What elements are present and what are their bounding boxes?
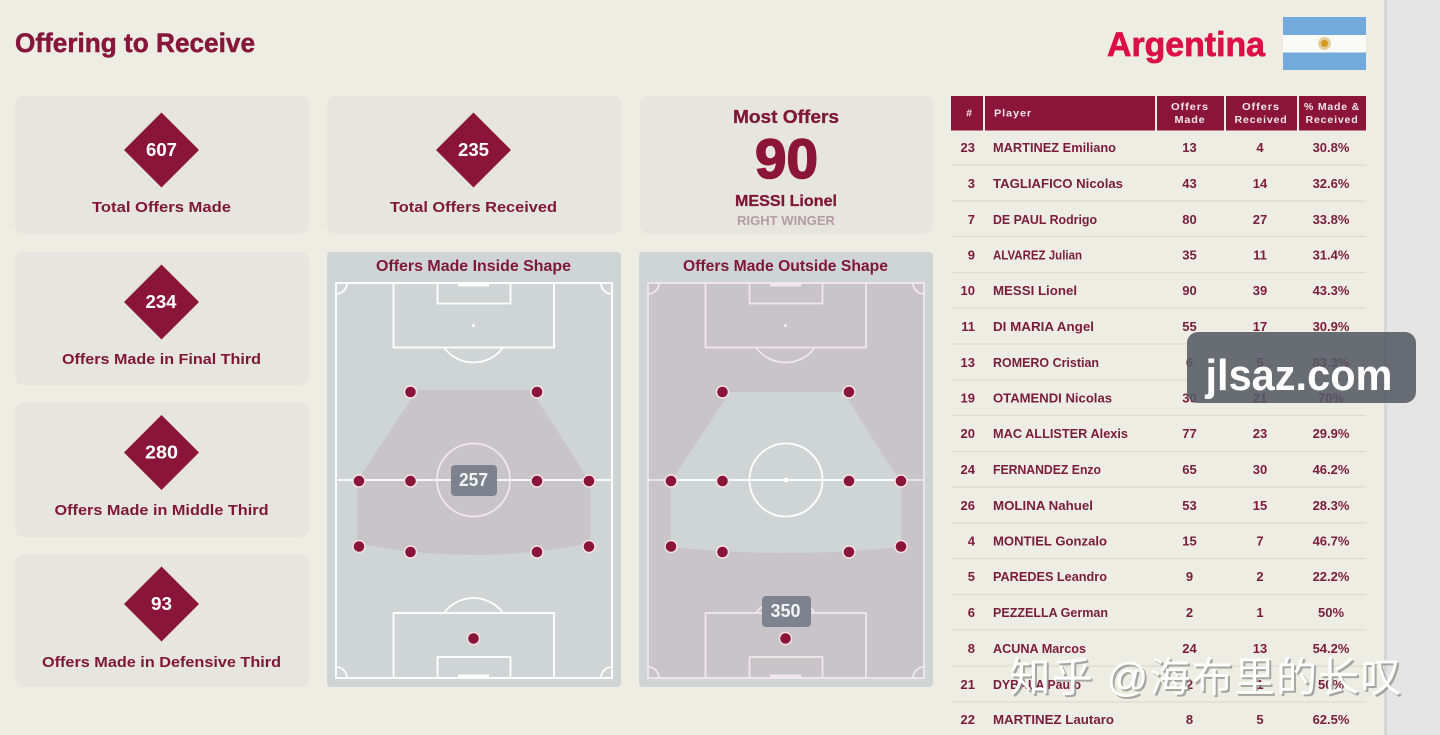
heading: Offers Made Outside Shape	[683, 258, 888, 275]
row: Molina: 28.3%	[1313, 498, 1350, 513]
row: Paredes: 5	[968, 569, 975, 584]
label: Offers Made in Middle Third	[54, 502, 268, 519]
panel: offers made inside shape	[327, 252, 621, 687]
row: Di Maria: 17	[1253, 319, 1267, 334]
row: Montiel: 4	[968, 534, 976, 548]
row: Montiel: 7	[1256, 534, 1264, 548]
row: Montiel: MONTIEL Gonzalo	[993, 534, 1107, 548]
shaded pitch area	[648, 283, 924, 678]
player position dots	[353, 386, 595, 644]
table header: Offers	[1171, 101, 1209, 113]
row: Romero: ROMERO Cristian	[993, 355, 1099, 370]
row: Mac Allister: 20	[961, 426, 975, 441]
row: Mac Allister	[961, 426, 1350, 441]
icon: Argentina flag	[1283, 17, 1366, 70]
row: Martinez Lautaro: MARTINEZ Lautaro	[993, 712, 1114, 727]
row: Pezzella: 50%	[1318, 605, 1344, 620]
row: Martinez Emiliano: 13	[1182, 140, 1197, 155]
row: Messi	[961, 283, 1350, 298]
panel: offers in final third	[15, 252, 309, 385]
value badge 257: 257	[459, 470, 488, 490]
row: Martinez Lautaro: 8	[1186, 712, 1193, 727]
row: Martinez Emiliano: 23	[961, 140, 975, 155]
row: Mac Allister: 77	[1182, 426, 1197, 441]
row: De Paul	[968, 212, 1350, 227]
row: Fernandez: 46.2%	[1313, 462, 1350, 477]
row: Martinez Emiliano: 4	[1256, 140, 1264, 155]
row: Tagliafico: 3	[968, 176, 975, 191]
row: Montiel: 46.7%	[1313, 534, 1350, 548]
row: Acuna	[968, 641, 1350, 656]
row: De Paul: 7	[968, 212, 975, 227]
title: Offering to Receive	[15, 28, 255, 58]
icon: diamond 280	[124, 415, 199, 490]
row: Romero	[961, 355, 1350, 370]
player position dots	[665, 386, 907, 644]
heading: Most Offers	[733, 107, 839, 127]
row: Montiel: 15	[1182, 534, 1197, 548]
row: Alvarez: ALVAREZ Julian	[993, 248, 1082, 262]
row: Martinez Lautaro	[961, 712, 1350, 727]
player name: MESSI Lionel	[735, 193, 837, 210]
row: Fernandez	[961, 462, 1350, 477]
value badge 257	[451, 465, 497, 496]
label: Total Offers Made	[92, 199, 231, 216]
big number: 90	[755, 127, 818, 190]
row: Paredes: 9	[1186, 569, 1193, 584]
row: Messi: 39	[1253, 283, 1267, 298]
row: Tagliafico: 32.6%	[1313, 176, 1350, 191]
row: Martinez Lautaro: 62.5%	[1313, 712, 1350, 727]
row: Di Maria: 30.9%	[1313, 319, 1350, 334]
table header: Received	[1234, 114, 1288, 126]
row: Otamendi: 21	[1253, 390, 1267, 406]
row: De Paul: 33.8%	[1313, 212, 1350, 227]
row: Martinez Emiliano	[961, 140, 1350, 155]
row: Acuna: 54.2%	[1313, 641, 1350, 656]
row: Dybala: 1	[1256, 677, 1264, 692]
table header: Offers	[1242, 101, 1280, 113]
row: Messi: 90	[1182, 283, 1197, 298]
row: Mac Allister: 29.9%	[1313, 426, 1350, 441]
pitch markings	[336, 283, 612, 678]
row: Tagliafico: TAGLIAFICO Nicolas	[993, 176, 1123, 191]
row: Fernandez: FERNANDEZ Enzo	[993, 462, 1101, 477]
row: Mac Allister: 23	[1253, 426, 1267, 441]
value badge 350	[762, 596, 811, 627]
row: Alvarez: 35	[1182, 248, 1197, 262]
row: Pezzella: 2	[1186, 605, 1193, 620]
label: Offers Made in Defensive Third	[42, 654, 281, 671]
row: Romero: 5	[1256, 355, 1264, 370]
row: Martinez Emiliano: MARTINEZ Emiliano	[993, 140, 1116, 155]
row: Pezzella	[968, 605, 1344, 620]
row: Paredes: 22.2%	[1313, 569, 1350, 584]
table header: #	[966, 108, 973, 120]
icon: diamond 93	[124, 566, 199, 642]
icon: diamond 234	[124, 264, 199, 340]
row: Tagliafico	[968, 176, 1350, 191]
row: Otamendi: 19	[961, 390, 975, 406]
icon: diamond 235	[436, 112, 511, 188]
icon: diamond 235: 235	[458, 140, 489, 160]
row: Otamendi: 70%	[1318, 390, 1344, 406]
row: Otamendi: OTAMENDI Nicolas	[993, 390, 1112, 406]
row: De Paul: 27	[1253, 212, 1267, 227]
row: Romero: 6	[1186, 355, 1193, 370]
row: De Paul: 80	[1182, 212, 1197, 227]
panel: offers in middle third	[15, 403, 309, 537]
panel: total offers received	[327, 96, 622, 234]
row: Messi: 43.3%	[1313, 283, 1350, 298]
row: Martinez Lautaro: 22	[961, 712, 975, 727]
row: Paredes	[968, 569, 1350, 584]
row: Pezzella: 6	[968, 605, 975, 620]
row: Molina: 26	[961, 498, 975, 513]
row: Tagliafico: 43	[1182, 176, 1197, 191]
row: Messi: MESSI Lionel	[993, 283, 1077, 298]
row: Acuna: 13	[1253, 641, 1267, 656]
panel: most offers	[640, 96, 933, 234]
row: Dybala	[961, 677, 1344, 692]
shaded shape area	[357, 390, 590, 555]
row: Di Maria: 55	[1182, 319, 1197, 334]
row: Molina: 53	[1182, 498, 1197, 513]
row: Paredes: 2	[1256, 569, 1264, 584]
panel: total offers made	[15, 96, 309, 234]
row: Dybala: DYBALA Paulo	[993, 677, 1081, 692]
row: Romero: 13	[961, 355, 975, 370]
player position: RIGHT WINGER	[737, 213, 836, 228]
panel: offers made outside shape	[639, 252, 933, 687]
label: Total Offers Received	[390, 199, 557, 216]
table header: Player	[994, 108, 1032, 120]
row: Otamendi	[961, 390, 1344, 406]
row: Fernandez: 65	[1182, 462, 1197, 477]
row: Alvarez: 9	[968, 248, 975, 262]
row: Fernandez: 30	[1253, 462, 1267, 477]
row: Molina: MOLINA Nahuel	[993, 498, 1093, 513]
watermark: zhihu author: 知乎 @海布里的长叹	[1010, 654, 1402, 700]
value badge 350: 350	[770, 601, 800, 621]
table header: Received	[1306, 114, 1358, 126]
row: Martinez Lautaro: 5	[1256, 712, 1264, 727]
row: Dybala: 50%	[1318, 677, 1344, 692]
watermark: jlsaz.com	[1187, 332, 1416, 403]
row: Fernandez: 24	[961, 462, 976, 477]
row: Montiel	[968, 534, 1350, 548]
row: Paredes: PAREDES Leandro	[993, 569, 1107, 584]
row: Martinez Emiliano: 30.8%	[1313, 140, 1350, 155]
row: Pezzella: PEZZELLA German	[993, 605, 1108, 620]
panel: offers in defensive third	[15, 555, 309, 687]
row: Tagliafico: 14	[1253, 176, 1268, 191]
row: Dybala: 2	[1186, 677, 1193, 692]
row: Acuna: 8	[968, 641, 975, 656]
row: Alvarez: 31.4%	[1313, 248, 1350, 262]
icon: diamond 93: 93	[151, 594, 172, 614]
table header: Made	[1174, 114, 1206, 126]
label: Offers Made in Final Third	[62, 351, 261, 368]
table header	[951, 96, 1366, 130]
icon: diamond 607	[124, 112, 199, 188]
heading: Offers Made Inside Shape	[376, 258, 571, 275]
row dividers	[951, 165, 1366, 702]
row: Romero: 83.3%	[1313, 355, 1350, 370]
row: Di Maria	[961, 319, 1350, 334]
row: Molina	[961, 498, 1350, 513]
row: De Paul: DE PAUL Rodrigo	[993, 212, 1097, 227]
row: Otamendi: 30	[1182, 390, 1197, 406]
row: Di Maria: 11	[961, 319, 975, 334]
watermark: jlsaz.com: jlsaz.com	[1205, 351, 1392, 400]
row: Acuna: ACUNA Marcos	[993, 641, 1086, 656]
row: Dybala: 21	[961, 677, 975, 692]
row: Pezzella: 1	[1256, 605, 1264, 620]
row: Mac Allister: MAC ALLISTER Alexis	[993, 426, 1128, 441]
inner shape area	[671, 392, 901, 553]
icon: diamond 234: 234	[146, 292, 176, 312]
row: Acuna: 24	[1182, 641, 1197, 656]
row: Alvarez	[968, 248, 1350, 262]
row: Molina: 15	[1253, 498, 1267, 513]
icon: diamond 280: 280	[145, 442, 178, 462]
table: player offers	[951, 96, 1366, 727]
row: Alvarez: 11	[1253, 248, 1267, 262]
table header: % Made &	[1304, 101, 1360, 113]
row: Messi: 10	[961, 283, 975, 298]
pitch markings	[648, 283, 924, 678]
country name: Argentina	[1107, 26, 1266, 64]
row: Di Maria: DI MARIA Angel	[993, 319, 1094, 334]
icon: diamond 607: 607	[146, 140, 177, 160]
watermark: zhihu author: 知乎 @海布里的长叹	[1012, 656, 1404, 702]
